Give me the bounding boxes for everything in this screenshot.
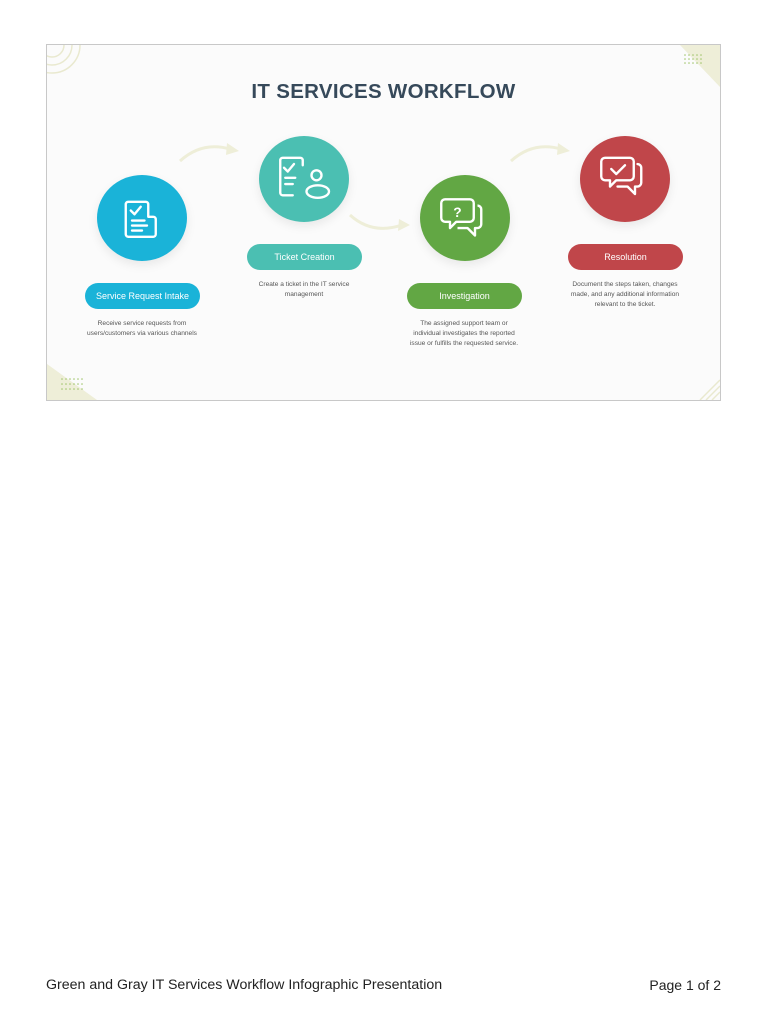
step 4: resolution (568, 136, 683, 308)
corner decoration top-left (47, 45, 81, 74)
corner decoration bottom-right (700, 380, 720, 400)
label pill (407, 283, 522, 309)
corner decoration top-right (680, 45, 720, 87)
description: The assigned support team or individual investigates the reported issue or fulfills the requested service. (410, 320, 518, 347)
label pill: Ticket Creation (274, 252, 335, 262)
icon: question chat circle green (420, 175, 510, 261)
label pill (247, 244, 362, 270)
title: IT SERVICES WORKFLOW (251, 80, 516, 103)
description: Document the steps taken, changes made, and any additional information relevant to the ticket. (571, 281, 679, 308)
label pill: Investigation (439, 291, 490, 301)
step 2: ticket creation (247, 136, 362, 298)
slide panel (46, 44, 721, 401)
description: Receive service requests from users/customers via various channels (87, 320, 197, 337)
label pill (568, 244, 683, 270)
footer right: Page 1 of 2 (649, 977, 721, 993)
icon: document circle blue (97, 175, 187, 261)
label pill (85, 283, 200, 309)
step 1: service request intake (85, 175, 200, 337)
corner decoration bottom-left (47, 364, 97, 400)
label pill: Service Request Intake (96, 291, 189, 301)
icon: question chat circle green: ? (453, 205, 462, 220)
footer left: Green and Gray IT Services Workflow Infographic Presentation (46, 977, 442, 993)
description: Create a ticket in the IT service management (259, 281, 349, 298)
step 3: investigation (407, 175, 522, 347)
icon: check chat circle red (580, 136, 670, 222)
icon: ticket circle teal (259, 136, 349, 222)
label pill: Resolution (604, 252, 647, 262)
arrows (179, 143, 570, 231)
